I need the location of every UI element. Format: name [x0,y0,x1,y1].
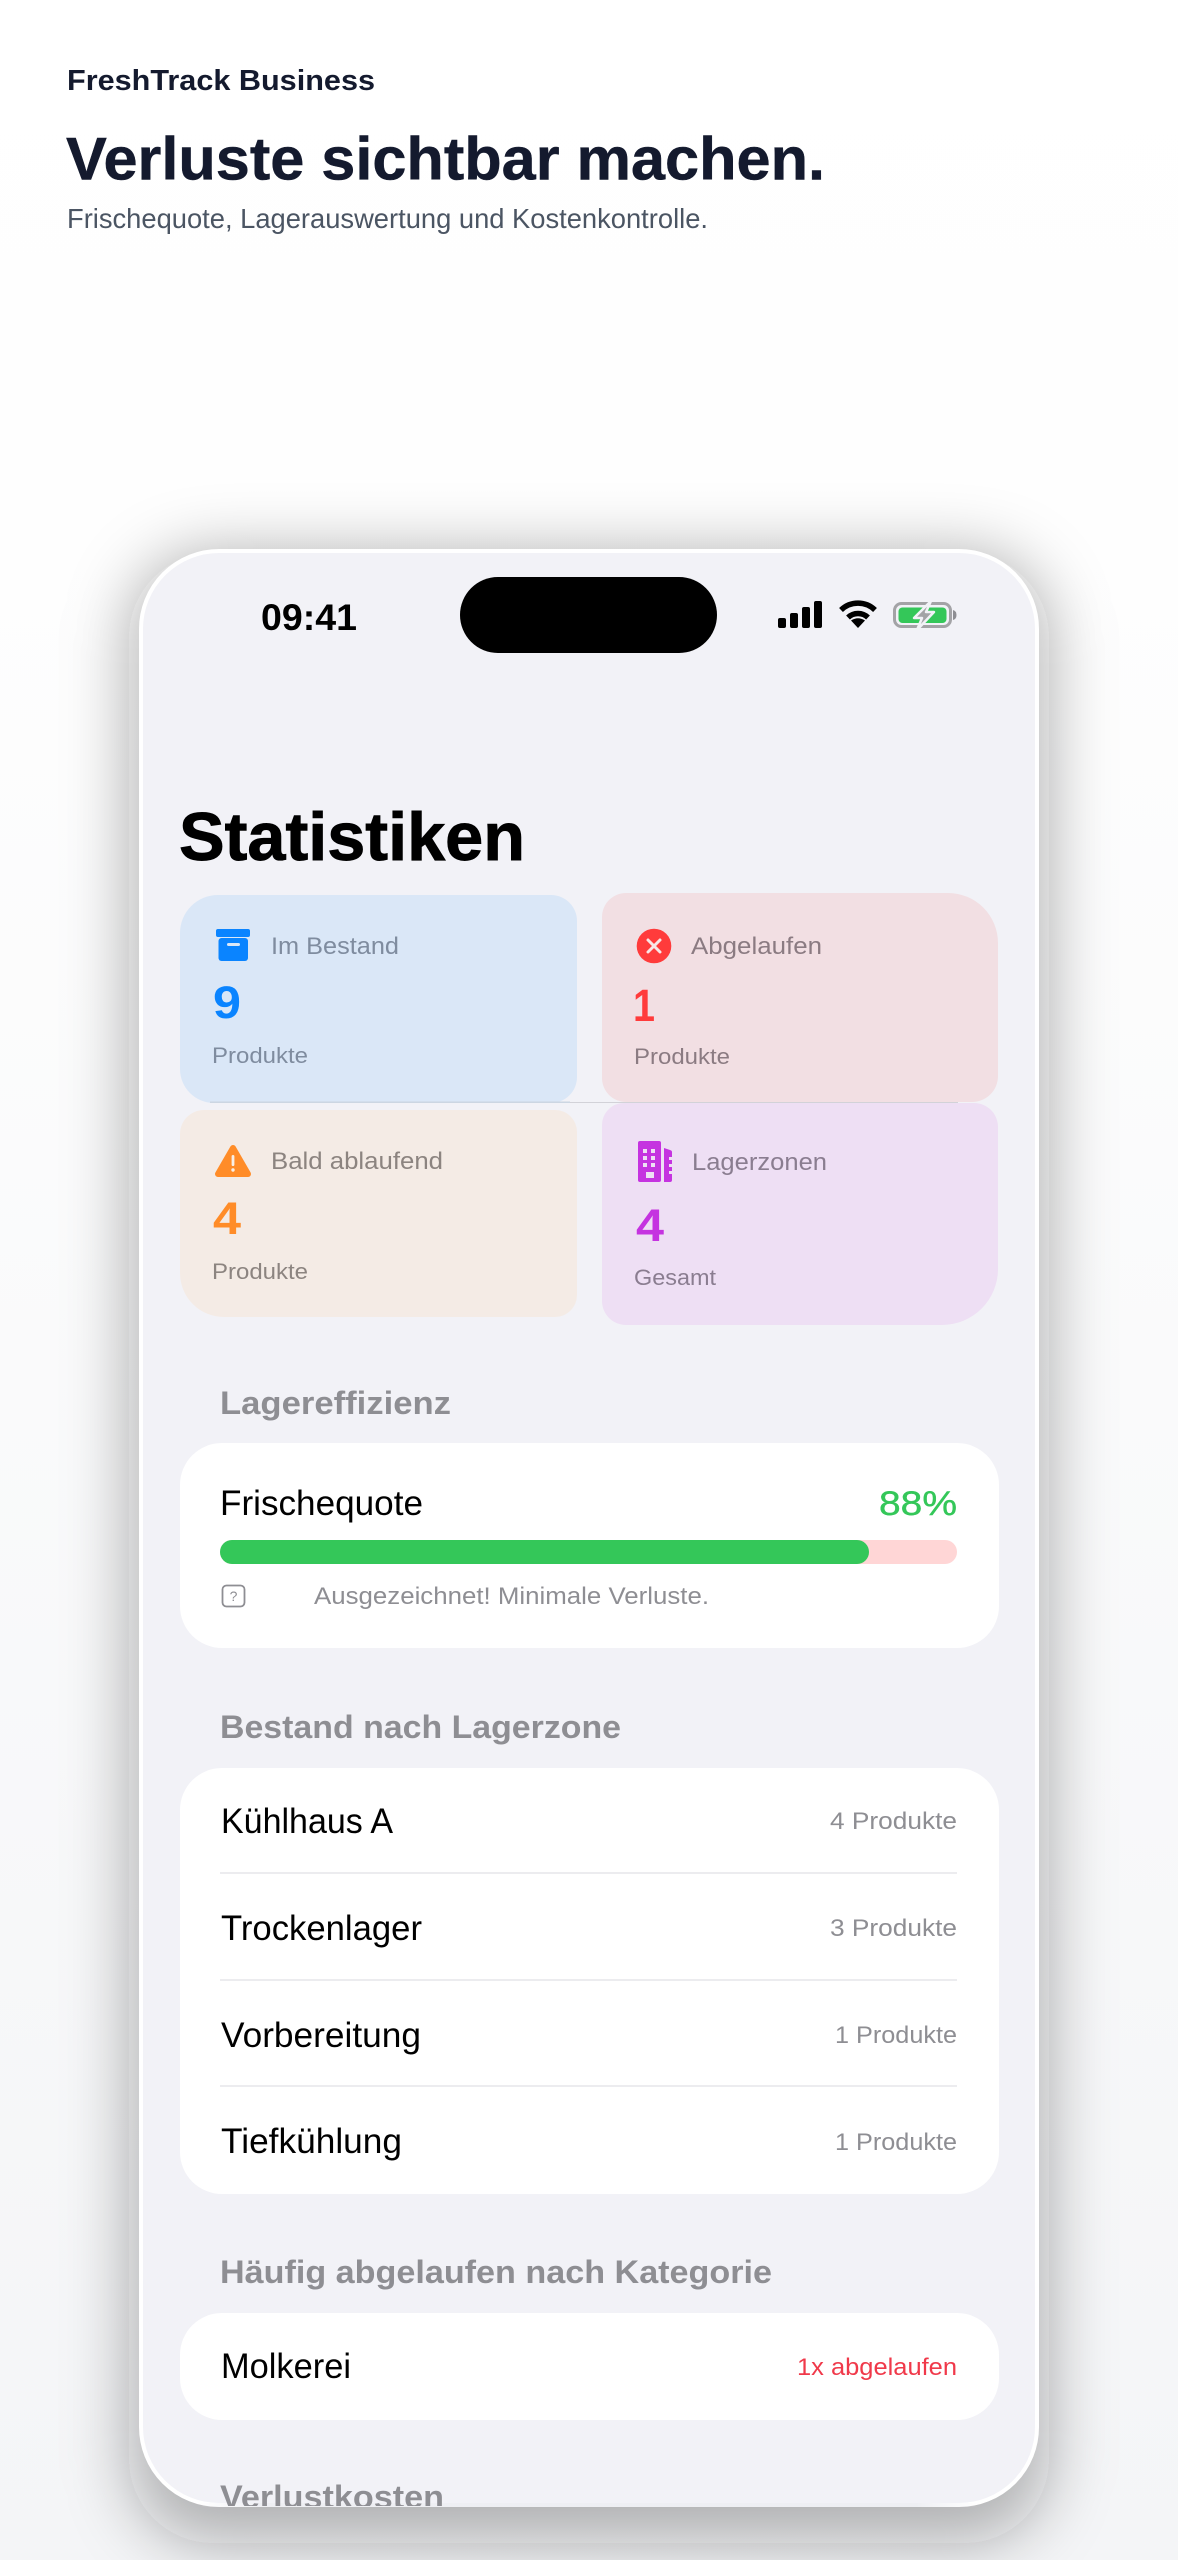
row: Kühlhaus A: 4 Produkte [830,1808,957,1835]
unit: Produkte [634,1044,730,1069]
row: Vorbereitung: 1 Produkte [835,2022,957,2049]
row: Kühlhaus A [221,1802,957,1841]
percentage: 88% [879,1485,957,1523]
hint text: Ausgezeichnet! Minimale Verluste. [314,1583,709,1610]
panel: Lagerzonen [602,1103,998,1325]
row: Trockenlager: 3 Produkte [830,1915,957,1942]
headline: Verluste sichtbar machen. [66,126,825,192]
icon: missing glyph question [222,1586,244,1606]
label: Im Bestand [271,933,399,960]
row: Tiefkühlung [221,2122,957,2161]
phone mockup [141,551,1037,2515]
row: Kühlhaus A: Kühlhaus A [221,1802,394,1841]
panel: expired by category [180,2313,999,2420]
panel: Im Bestand [180,895,577,1103]
card background [180,1110,577,1317]
heading: Lagereffizienz: Lagereffizienz [220,1385,451,1421]
icon: missing glyph question: ? [230,1588,238,1604]
card background [180,1443,999,1648]
card background [602,893,998,1102]
phone body [141,551,1037,2505]
unit: Produkte [212,1043,308,1068]
icon: warning triangle [218,1148,248,1174]
progress bar [220,1540,957,1564]
label: Abgelaufen [691,933,822,960]
card background [180,895,577,1103]
label: Frischequote [220,1484,423,1523]
icon: battery charging [894,601,956,630]
status bar [261,577,956,653]
dynamic island [460,577,717,653]
card background [180,1768,999,2194]
card background [180,2313,999,2420]
row: Tiefkühlung: 1 Produkte [835,2129,957,2156]
heading: Verlustkosten (clipped): Verlustkosten [220,2479,444,2515]
row label: Molkerei [221,2347,351,2386]
heading: Häufig abgelaufen nach Kategorie: Häufig abgelaufen nach Kategorie [220,2254,772,2290]
value: 9 [213,977,241,1028]
panel: Abgelaufen [602,893,998,1102]
row: Trockenlager [221,1909,957,1948]
brand name: FreshTrack Business [67,65,375,97]
panel: stock by zone [180,1768,999,2194]
clock: 09:41 [261,597,357,638]
label: Lagerzonen [692,1149,827,1176]
panel: Bald ablaufend [180,1110,577,1317]
heading: Bestand nach Lagerzone: Bestand nach Lagerzone [220,1709,621,1745]
subtitle: Frischequote, Lagerauswertung und Kostenkontrolle. [67,203,708,234]
row: Vorbereitung [221,2016,957,2055]
header [66,65,825,234]
icon: signal [778,601,822,628]
icon: building [638,1141,672,1182]
label: Bald ablaufend [271,1148,443,1175]
icon: archive box [216,929,250,961]
row: Tiefkühlung: Tiefkühlung [221,2122,402,2161]
row: Trockenlager: Trockenlager [221,1909,422,1948]
unit: Gesamt [634,1265,716,1290]
panel: Frischequote [180,1443,999,1648]
row value: 1x abgelaufen [797,2354,957,2381]
value: 1 [633,980,655,1031]
row: Vorbereitung: Vorbereitung [221,2016,421,2055]
icon: x circle [637,929,671,963]
phone shadow [129,553,1049,2543]
value: 4 [636,1200,664,1251]
screen title: Statistiken [179,799,525,875]
icon: wifi [841,603,875,628]
card background [602,1103,998,1325]
unit: Produkte [212,1259,308,1284]
value: 4 [213,1193,241,1244]
